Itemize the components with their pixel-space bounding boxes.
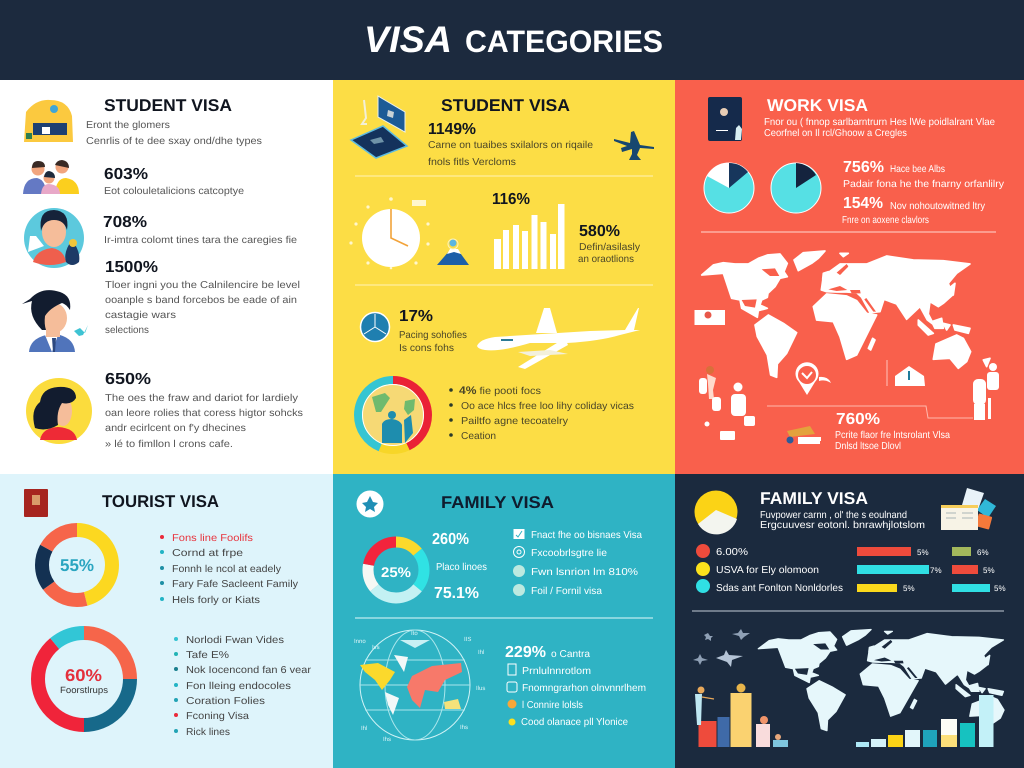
- icon: laptop: [351, 96, 407, 158]
- stat 1500%: ooanple s band forcebos be eade of ain: [105, 295, 297, 306]
- stat 650%: 650%: [105, 371, 151, 388]
- world map: [702, 251, 990, 377]
- globe list: Prnlulnnrotlom: [522, 666, 591, 677]
- list 2: Fon lleing endocoles: [186, 681, 291, 692]
- list 2: Tafe E%: [186, 650, 229, 661]
- list 2: Rick lines: [186, 727, 230, 738]
- heading: STUDENT VISA: [441, 96, 570, 115]
- donut 60%: Foorstlrups: [60, 685, 109, 695]
- list 2: Fconing Visa: [186, 711, 249, 722]
- donut stats: 75.1%: [434, 585, 479, 602]
- donut 55%: 55%: [60, 556, 94, 575]
- list 1: Fons line Foolifs: [172, 533, 253, 544]
- list 1: Fary Fafe Sacleent Family: [172, 579, 298, 590]
- stat 1500%: selections: [105, 325, 149, 336]
- bar rows: 5%: [983, 566, 995, 575]
- feature list: Fxcoobrlsgtre lie: [531, 548, 607, 559]
- stat 17%: Is cons fohs: [399, 343, 454, 354]
- list 1: [160, 533, 298, 606]
- donut stats: Placo linoes: [436, 562, 487, 573]
- stat 603%: 603%: [104, 166, 148, 183]
- stat 154%: [842, 195, 985, 226]
- bullet list: 4% fie pooti focs: [459, 385, 541, 397]
- stat 603%: [104, 166, 244, 197]
- world map: [758, 630, 1004, 731]
- stat 650%: » lé to fimllon l crons cafe.: [105, 439, 233, 450]
- list 1: Hels forly or Kiats: [172, 595, 260, 606]
- stat 229%: 229%: [505, 644, 546, 661]
- title: CATEGORIES: [465, 24, 663, 59]
- globe: IIS: [464, 636, 471, 643]
- globe: Inno: [354, 638, 366, 645]
- intro text: Ergcuuvesr eotonl. bnrawhjlotslom: [760, 520, 925, 531]
- icon: sign left: [694, 310, 725, 325]
- pie chart 1: [704, 163, 754, 213]
- stat 650%: The oes the fraw and dariot for lardiely: [105, 393, 298, 404]
- panel: student visa yellow: [333, 80, 675, 474]
- donut stats: 260%: [432, 531, 469, 548]
- stat 116%: 116%: [492, 191, 530, 208]
- connector lines: [767, 406, 973, 418]
- stat 650%: andr ecirlcent on f'y dhecines: [105, 423, 246, 434]
- title: VISA: [364, 19, 452, 60]
- stat 1500%: [105, 259, 300, 336]
- stat 760%: Pcrite flaor fre lntsrolant Vlsa: [835, 430, 950, 441]
- list 2: Nok Iocencond fan 6 vear: [186, 665, 312, 676]
- bar chart: [494, 204, 564, 269]
- bar rows: 6%: [977, 548, 989, 557]
- stat 650%: oan leore rolies that coress higtor sohcks: [105, 408, 303, 419]
- stat 1500%: Tloer ingni you the Calnilencire be level: [105, 280, 300, 291]
- heading: FAMILY VISA: [441, 493, 554, 512]
- feature list: Foil / Fornil visa: [531, 586, 602, 597]
- icon: location pin: [796, 362, 831, 395]
- globe: Ihs: [383, 736, 391, 743]
- icon: woman in suit: [22, 290, 88, 352]
- stat 1500%: castagie wars: [105, 310, 176, 321]
- icon: documents: [941, 488, 996, 530]
- icon: navy plane: [614, 131, 654, 160]
- stat 756%: 756%: [843, 159, 884, 176]
- stat 154%: 154%: [843, 195, 883, 212]
- globe: Ivs: [372, 644, 380, 651]
- donut 60%: 60%: [65, 666, 102, 685]
- intro text: [86, 120, 262, 147]
- intro text: Cenrlis of te dee sxay ond/dhe types: [86, 136, 262, 147]
- legend: 6.00%: [716, 547, 748, 558]
- bar chart with figures: [695, 684, 788, 747]
- heading: WORK VISA: [767, 96, 868, 115]
- globe: Ihs: [460, 724, 468, 731]
- icon: passport: [708, 97, 742, 141]
- icon: tent: [887, 360, 925, 386]
- intro text: Fuvpower carnn , ol' the s eoulnand: [760, 510, 907, 521]
- stat 17%: [399, 308, 467, 354]
- bar rows: 5%: [994, 584, 1006, 593]
- bar chart right: [856, 695, 994, 747]
- stat 760%: Dnlsd ltsoe Dlovl: [835, 441, 901, 452]
- donut 25%: 25%: [381, 564, 412, 580]
- stat 580%: 580%: [579, 223, 620, 240]
- list 1: Cornd at frpe: [172, 548, 244, 559]
- panel: student visa white: [0, 80, 333, 474]
- stat 708%: [103, 214, 297, 246]
- stat 580%: an oraotlions: [578, 254, 634, 265]
- donut stats: [432, 531, 487, 602]
- feature list: Fnact fhe oo bisnaes Visa: [531, 530, 642, 541]
- intro text: [760, 510, 925, 531]
- ring icon: people: [358, 380, 428, 450]
- stat 1500%: 1500%: [105, 259, 158, 276]
- stat 580%: [578, 223, 640, 265]
- legend: Sdas ant Fonlton Nonldorles: [716, 583, 843, 594]
- icon: mountain: [437, 239, 469, 265]
- stat 1149%: Carne on tuaibes sxilalors on riqaile: [428, 140, 593, 151]
- pie chart 2: [771, 163, 821, 213]
- stat 1149%: fnols fitls Vercloms: [428, 157, 516, 168]
- stat 650%: [105, 371, 303, 450]
- stat 708%: Ir-imtra colomt tines tara the caregies fie: [104, 235, 297, 246]
- stat 580%: Defin/asilasly: [579, 242, 640, 253]
- icon: man avatar: [24, 208, 84, 268]
- stat 154%: Fnre on aoxene clavlors: [842, 215, 929, 226]
- globe: Ito: [411, 630, 418, 637]
- bar rows: 5%: [903, 584, 915, 593]
- list 2: Coration Folies: [186, 696, 265, 707]
- intro text: Eront the glomers: [86, 120, 170, 131]
- intro text: Fnor ou ( fnnop sarlbarntrurn Hes lWe poidlalrant Vlae: [764, 117, 995, 128]
- legend: USVA for Ely olomoon: [716, 565, 819, 576]
- heading: FAMILY VISA: [760, 489, 868, 508]
- icon: blue gauge: [360, 312, 390, 342]
- header banner: [0, 0, 1024, 80]
- globe: Ilus: [476, 685, 485, 692]
- bar rows: [857, 547, 1006, 593]
- icon: woman avatar: [26, 378, 92, 444]
- figures right: [973, 363, 999, 420]
- list 2: Norlodi Fwan Vides: [186, 635, 284, 646]
- icon: white airplane: [477, 308, 640, 369]
- figures left: [699, 366, 755, 440]
- icon: red passport: [24, 489, 48, 517]
- bullet list: Oo ace hlcs free loo lihy coliday vicas: [461, 401, 634, 412]
- globe: [354, 630, 485, 743]
- stat 756%: Padair fona he the fnarny orfanlilry: [843, 179, 1004, 190]
- donut 25%: [368, 542, 424, 598]
- panel: family visa navy: [675, 474, 1024, 768]
- bar rows: 7%: [930, 566, 942, 575]
- globe list: Cood olanace pll Ylonice: [521, 717, 628, 728]
- stat 229%: o Cantra: [551, 649, 590, 660]
- stat 760%: 760%: [836, 411, 880, 428]
- heading: TOURIST VISA: [102, 492, 219, 511]
- stat 756%: [843, 159, 1004, 190]
- intro text: Ceorfnel on Il rcl/Ghoow a Cregles: [764, 128, 907, 139]
- icon: stars: [693, 629, 750, 667]
- bullet list: [449, 385, 634, 442]
- heading: STUDENT VISA: [104, 96, 232, 115]
- donut 60%: [38, 633, 130, 725]
- globe list: Fnomngrarhon olnvnnrlhem: [522, 683, 646, 694]
- list 1: Fonnh le ncol at eadely: [172, 564, 281, 575]
- bullet list: Ceation: [461, 431, 496, 442]
- stat 708%: 708%: [103, 214, 147, 231]
- icon: clock: [349, 197, 430, 269]
- stat 229%: [505, 644, 590, 661]
- stat 603%: Eot colouletalicions catcoptye: [104, 186, 244, 197]
- stat 154%: Nov nohoutowitned ltry: [890, 201, 985, 212]
- pie icon: [694, 490, 738, 534]
- stat 17%: 17%: [399, 308, 433, 325]
- bar rows: 5%: [917, 548, 929, 557]
- globe: Ihl: [478, 649, 484, 656]
- stat 1149%: [428, 121, 593, 168]
- globe list: l Connire lolsls: [522, 700, 583, 711]
- stat 760%: [835, 411, 950, 452]
- stat 17%: Pacing sohofies: [399, 330, 467, 341]
- feature list: Fwn lsnrion lm 810%: [531, 567, 638, 578]
- globe list: [507, 664, 646, 728]
- intro text: [764, 117, 995, 139]
- icon: star badge: [356, 490, 384, 518]
- legend: [696, 544, 843, 594]
- panel: work visa: [675, 80, 1024, 474]
- globe: Ihl: [361, 725, 367, 732]
- icon: family: [23, 160, 79, 194]
- list 2: [174, 635, 312, 738]
- icon: documents: [786, 426, 821, 444]
- panel: tourist visa: [0, 474, 333, 768]
- stat 756%: Hace bee Albs: [890, 164, 945, 175]
- feature list: [513, 529, 642, 597]
- panel: family visa teal: [333, 474, 675, 768]
- stat 1149%: 1149%: [428, 121, 476, 138]
- donut 55%: [42, 530, 112, 600]
- icon: student bag: [24, 100, 73, 142]
- bullet list: Pailtfo agne tecoatelry: [461, 416, 568, 427]
